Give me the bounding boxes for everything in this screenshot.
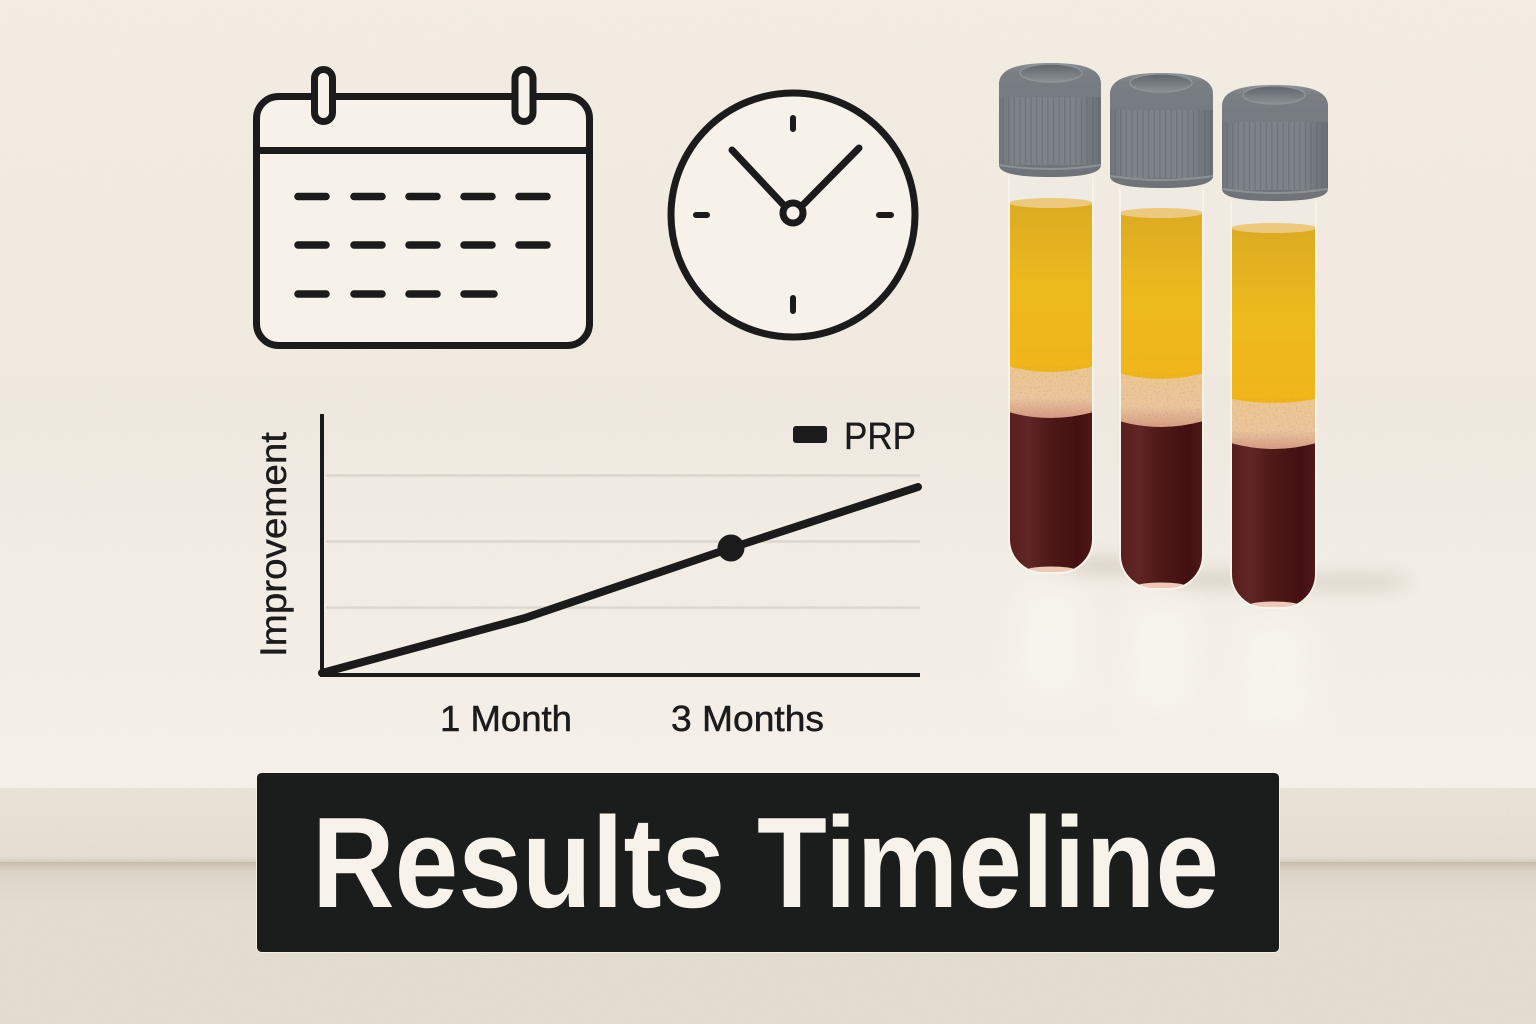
calendar date dashes [298,196,547,294]
tube 2 cap [1110,73,1213,188]
title text: Results Timeline [312,791,1219,935]
line chart: improvement over time [253,414,920,739]
x-axis label: 1 month: 1 Month [440,698,572,739]
icon: calendar [256,70,590,346]
test tube 3 [1222,85,1328,615]
PRP data line [322,487,918,673]
icon: clock [671,93,915,337]
calendar binding rings [314,70,533,122]
x-axis label: 3 months: 3 Months [671,698,824,739]
tube 1 cap [999,63,1101,177]
chart axes [322,414,920,675]
tube shadows and reflections on counter [1015,558,1410,730]
test tube 2 [1110,73,1213,595]
title banner [256,772,1280,952]
data point marker [718,534,744,562]
tube 3 cap [1222,85,1328,201]
y-axis label: Improvement [253,431,294,657]
legend swatch [793,426,827,443]
legend label: PRP [844,416,916,458]
test tube 1 [999,63,1101,580]
